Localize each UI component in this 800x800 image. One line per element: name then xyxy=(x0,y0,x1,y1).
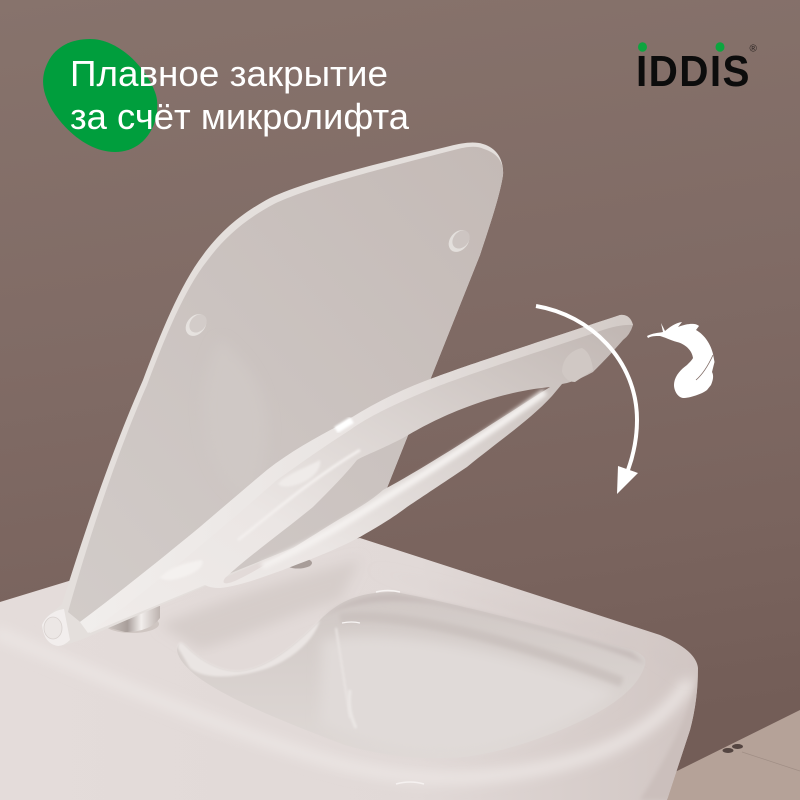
chrome hinge left xyxy=(105,606,160,633)
floor xyxy=(667,710,800,800)
title xyxy=(70,53,410,137)
bowl reflections xyxy=(335,628,338,642)
seat bumper far xyxy=(562,348,593,382)
bowl opening xyxy=(177,592,516,704)
inner ridge xyxy=(238,450,360,540)
logo: IDDIS: IDDIS xyxy=(636,46,751,95)
seat body with opening xyxy=(80,315,633,633)
curved arrow xyxy=(536,306,638,494)
seat bumper mid xyxy=(278,460,320,487)
raised toilet lid xyxy=(42,143,503,646)
rim flap xyxy=(178,620,320,676)
toilet seat xyxy=(80,315,633,633)
strip highlight xyxy=(336,420,352,430)
lid rim xyxy=(42,143,503,646)
green blob xyxy=(43,39,157,152)
seat top strip xyxy=(80,315,633,633)
chrome hinge right xyxy=(284,519,312,568)
bowl inner shadow band xyxy=(344,595,639,660)
bowl interior lighter basin xyxy=(324,637,594,700)
title line 1: Плавное закрытие xyxy=(70,53,388,94)
hinge barrel xyxy=(42,609,70,646)
deck shadow under seat xyxy=(170,566,352,647)
lid inner face xyxy=(68,147,503,630)
lid bumper right xyxy=(444,226,474,256)
seat bumper near xyxy=(160,560,203,580)
lower arm sheen xyxy=(262,392,545,566)
front crease highlight xyxy=(282,678,694,783)
lid soft shade xyxy=(203,340,267,500)
toilet bowl body xyxy=(0,538,700,800)
icon: feather xyxy=(647,322,714,398)
lid bumper left xyxy=(181,310,211,340)
logo: IDDIS: ® xyxy=(750,44,758,54)
title line 2: за счёт микролифта xyxy=(70,96,410,137)
